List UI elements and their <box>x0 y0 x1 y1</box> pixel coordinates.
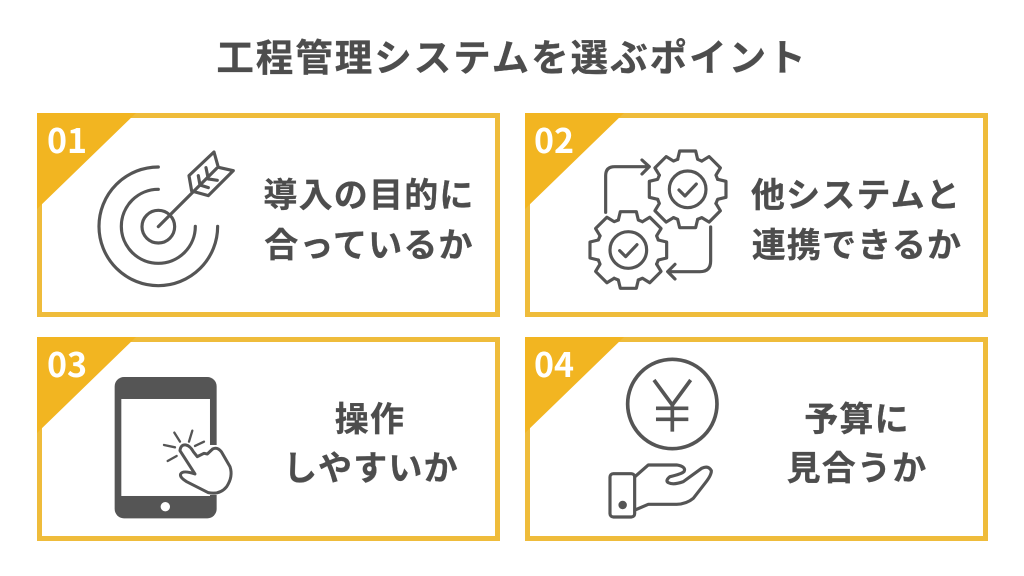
icon: tablet with tapping hand <box>115 377 231 518</box>
text: 操作しやすいか <box>283 392 459 490</box>
text: 操作しやすいか: しやすいか <box>283 441 459 490</box>
number badge 03 <box>37 337 136 433</box>
text: 導入の目的に合っているか: 導入の目的に <box>263 168 475 217</box>
panel 01 frame <box>40 116 498 314</box>
text: 導入の目的に合っているか: 合っているか <box>264 218 474 267</box>
text: 予算に見合うか <box>787 392 927 490</box>
icon: gears with cycle arrows <box>590 151 726 288</box>
panel: 03 usability <box>37 337 498 538</box>
number badge 02: 02 <box>534 114 574 163</box>
text: 操作しやすいか: 操作 <box>335 392 405 441</box>
text: 予算に見合うか: 見合うか <box>787 441 927 490</box>
icon: target and arrow <box>99 152 233 286</box>
panel: 04 budget <box>525 337 986 538</box>
panel: 01 purpose <box>37 113 498 314</box>
number badge 04: 04 <box>534 338 574 387</box>
text: 他システムと連携できるか <box>751 168 962 267</box>
number badge 01 <box>37 113 136 209</box>
title: 工程管理システムを選ぶポイント <box>216 27 808 82</box>
number badge 02 <box>525 113 624 209</box>
icon: yen coin over open hand <box>610 359 717 517</box>
number badge 04 <box>525 337 624 433</box>
panel 04 frame <box>528 340 986 538</box>
panel: 02 integration <box>525 113 986 314</box>
text: 他システムと連携できるか: 連携できるか <box>752 218 962 267</box>
number badge 01: 01 <box>47 114 87 163</box>
panel 03 frame <box>40 340 498 538</box>
text: 他システムと連携できるか: 他システムと <box>751 168 961 217</box>
text: 予算に見合うか: 予算に <box>804 392 910 441</box>
panel 02 frame <box>528 116 986 314</box>
number badge 03: 03 <box>47 338 87 387</box>
text: 導入の目的に合っているか <box>263 168 475 267</box>
